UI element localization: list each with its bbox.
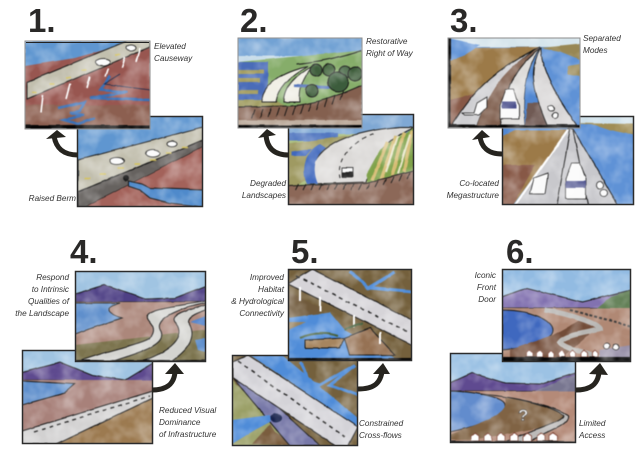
number 4: 4. bbox=[70, 233, 98, 270]
panel: reduced dominance bbox=[22, 350, 153, 444]
panel: constrained cross-flows bbox=[232, 355, 358, 446]
label: respond: the Landscape bbox=[15, 309, 69, 318]
label: improved: Improved bbox=[250, 273, 284, 282]
label: reduced: Reduced Visual bbox=[159, 406, 216, 415]
panel: degraded landscapes bbox=[288, 114, 414, 205]
label: separated modes: Modes bbox=[583, 46, 608, 55]
panel: iconic front door bbox=[502, 269, 631, 362]
step 4: intrinsic qualities bbox=[15, 233, 217, 444]
label: iconic: Door bbox=[478, 295, 496, 304]
label: reduced: of Infrastructure bbox=[159, 430, 217, 439]
panel: intrinsic qualities bbox=[75, 271, 206, 362]
panel: separated modes bbox=[448, 38, 580, 128]
step 6: front door bbox=[450, 233, 631, 443]
arrow 4 bbox=[152, 363, 184, 390]
step 3: separated modes bbox=[447, 2, 634, 205]
panel: raised berm bbox=[77, 116, 203, 207]
arrow 6 bbox=[576, 363, 608, 390]
label: improved: & Hydrological bbox=[231, 297, 284, 306]
number 1: 1. bbox=[28, 2, 56, 39]
label: elevated causeway: Causeway bbox=[154, 54, 193, 63]
step 1: causeway bbox=[25, 2, 203, 207]
arrow 3 bbox=[472, 130, 502, 154]
label: improved: Habitat bbox=[258, 285, 285, 294]
number 3: 3. bbox=[450, 2, 478, 39]
arrow 5 bbox=[358, 363, 390, 389]
number 2: 2. bbox=[240, 2, 268, 39]
label: reduced: Dominance bbox=[159, 418, 201, 427]
number 5: 5. bbox=[291, 233, 319, 270]
label: iconic: Front bbox=[477, 283, 497, 292]
arrow 2 bbox=[258, 129, 289, 155]
label: iconic: Iconic bbox=[475, 271, 496, 280]
arrow 1 bbox=[46, 130, 78, 155]
panel: restorative right of way bbox=[238, 38, 362, 128]
label: degraded: Landscapes bbox=[242, 191, 286, 200]
label: constrained: Cross-flows bbox=[359, 431, 402, 440]
label: separated modes: Separated bbox=[583, 34, 621, 43]
label: co-located: Megastructure bbox=[447, 191, 499, 200]
label: co-located: Co-located bbox=[459, 179, 499, 188]
label: respond: Respond bbox=[36, 273, 69, 282]
label: degraded: Degraded bbox=[250, 179, 286, 188]
label: respond: to Intrinsic bbox=[32, 285, 69, 294]
label: limited: Limited bbox=[579, 419, 605, 428]
label: restorative: Restorative bbox=[366, 37, 407, 46]
label: elevated causeway: Elevated bbox=[154, 42, 186, 51]
panel: limited access: ? bbox=[518, 406, 528, 425]
step 5: connectivity bbox=[231, 233, 412, 446]
step 2: restorative right of way bbox=[238, 2, 414, 205]
label: respond: Qualities of bbox=[28, 297, 70, 306]
label: restorative: Right of Way bbox=[366, 49, 414, 58]
label: improved: Connectivity bbox=[239, 309, 285, 318]
panel: elevated causeway bbox=[25, 41, 150, 129]
number 6: 6. bbox=[506, 233, 534, 270]
panel: improved habitat bbox=[288, 269, 412, 361]
panel: limited access bbox=[450, 353, 576, 443]
label: constrained: Constrained bbox=[359, 419, 403, 428]
label: limited: Access bbox=[578, 431, 605, 440]
panel: co-located megastructure bbox=[502, 116, 634, 205]
label: raised berm: Raised Berm bbox=[29, 194, 76, 203]
